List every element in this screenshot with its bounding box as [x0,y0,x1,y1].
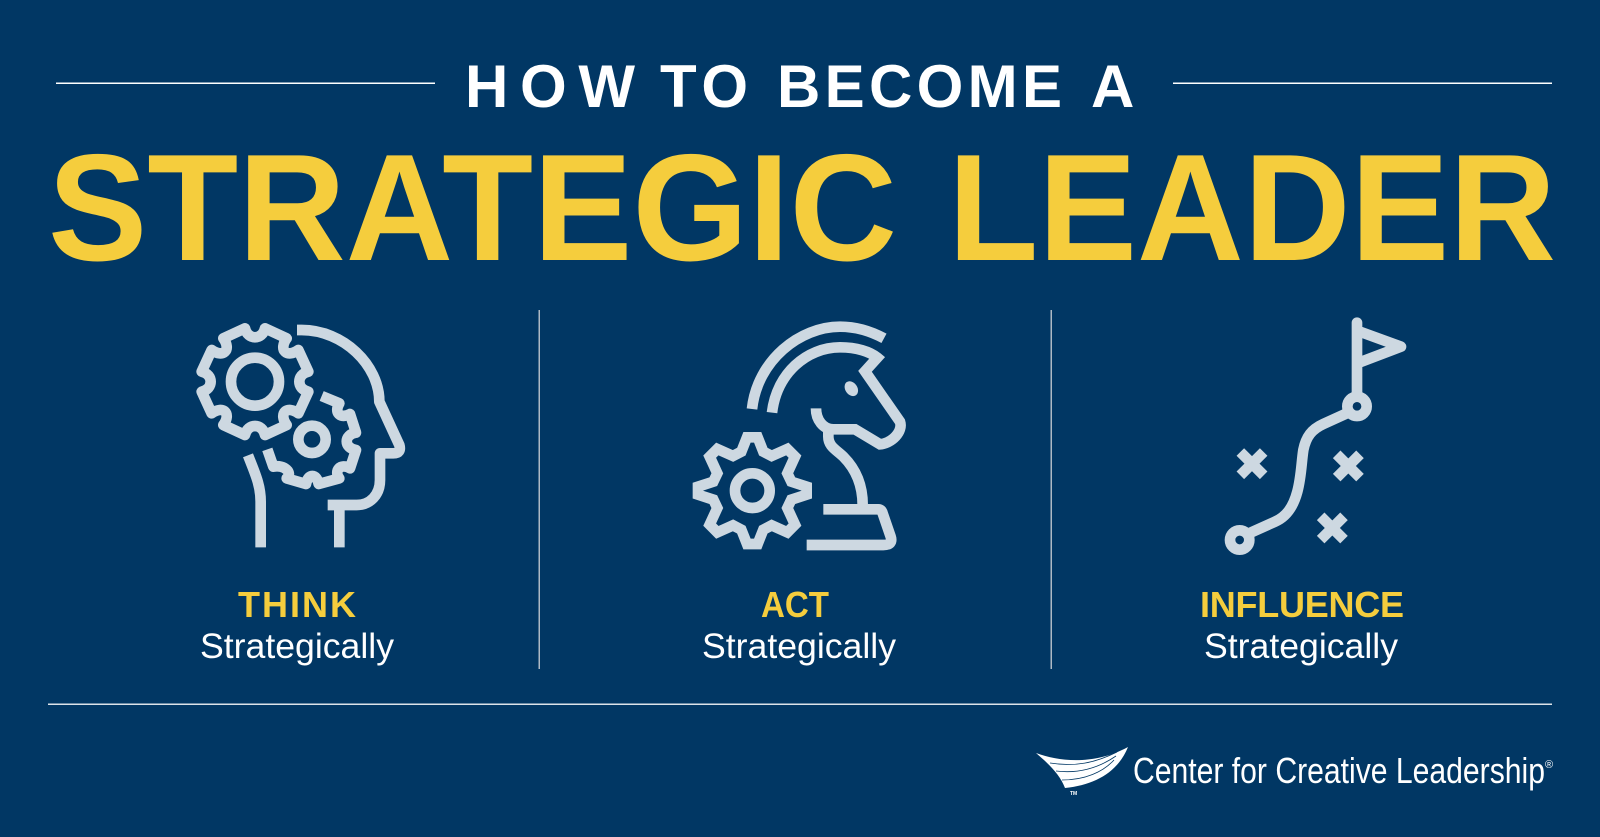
logo wing mark: TM [1070,791,1077,797]
registered mark: ® [1545,759,1553,771]
label: act strategically [702,584,897,666]
title: strategic leader [48,123,1556,293]
icon: chess knight with gear [698,327,901,545]
label: think strategically: Strategically [200,627,395,666]
label: influence strategically: INFLUENCE [1200,584,1404,625]
label: think strategically [200,584,395,666]
x marks [1240,452,1360,540]
label: influence strategically [1200,584,1404,666]
knight [752,327,901,545]
title: strategic leader: LEADER [948,123,1556,293]
route [1230,397,1367,550]
large gear [202,328,308,435]
title: how to become a: HOW [465,53,635,120]
logo: center for creative leadership [1036,747,1553,797]
label: think strategically: THINK [238,584,356,625]
label: influence strategically: Strategically [1204,627,1399,666]
title: how to become a [465,53,1134,120]
label: act strategically: ACT [761,584,829,625]
title: how to become a: TO [660,53,748,120]
icon: play diagram with flag [1230,323,1401,550]
title: strategic leader: STRATEGIC [48,123,897,293]
label: act strategically: Strategically [702,627,897,666]
logo wing mark [1036,747,1128,797]
icon: head with gears [202,328,400,547]
small gear [267,396,356,484]
gear [698,437,807,544]
title: how to become a: A [1091,53,1134,120]
head outline [248,330,400,547]
flag [1357,323,1401,397]
title: how to become a: BECOME [777,53,1062,120]
